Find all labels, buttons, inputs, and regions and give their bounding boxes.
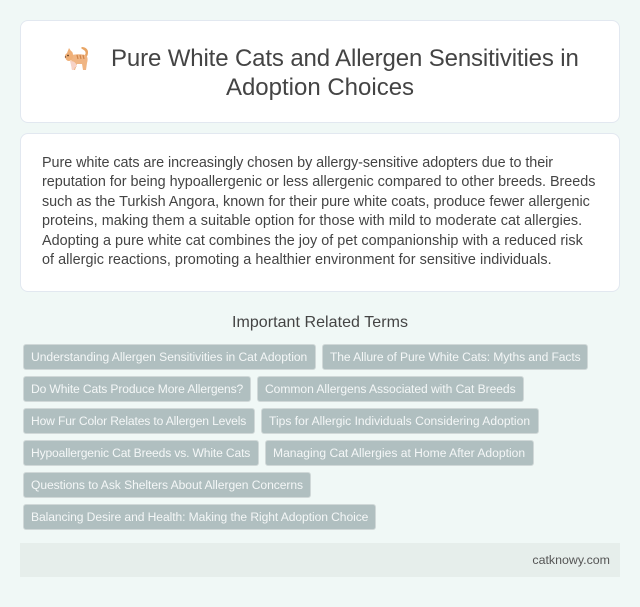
tags: related terms: Questions to Ask Shelters About Allergen Concerns (31, 478, 303, 492)
text block: description: Pure white cats are increasingly chosen by allergy-sensitive adopters due to their (42, 155, 553, 171)
text block: description: proteins, making them a suitable option for those with mild to moderate cat allergies. (42, 213, 582, 229)
text block: description (42, 155, 595, 268)
text block: description: Adopting a pure white cat combines the joy of pet companionship with a reduced risk (42, 233, 583, 249)
tags: related terms: The Allure of Pure White Cats: Myths and Facts (330, 350, 581, 364)
footer text: catknowy.com (532, 553, 610, 567)
tags: related terms: Hypoallergenic Cat Breeds vs. White Cats (31, 446, 250, 460)
text block: description: reputation for being hypoallergenic or less allergenic compared to other breeds. Breeds (42, 174, 595, 190)
icon: cat (64, 47, 88, 70)
footer bar (20, 543, 620, 577)
panel: description card (20, 133, 620, 292)
title: Pure White Cats and Allergen Sensitivities in (111, 45, 579, 72)
text block: description: of allergic reactions, promoting a healthier environment for sensitive individuals. (42, 252, 552, 268)
panel: title card (20, 20, 620, 123)
title line two: Adoption Choices (226, 74, 414, 101)
tags: related terms: Balancing Desire and Health: Making the Right Adoption Choice (31, 510, 368, 524)
tags: related terms: Understanding Allergen Sensitivities in Cat Adoption (31, 350, 307, 364)
tags: related terms: Common Allergens Associated with Cat Breeds (265, 382, 516, 396)
heading: important related terms: Important Related Terms (232, 314, 408, 331)
tags: related terms: How Fur Color Relates to Allergen Levels (31, 414, 246, 428)
tags: related terms: Managing Cat Allergies at Home After Adoption (273, 446, 525, 460)
text block: description: such as the Turkish Angora, known for their pure white coats, produce fewer allergenic (42, 194, 590, 210)
tags: related terms: Do White Cats Produce More Allergens? (31, 382, 243, 396)
tags: related terms: Tips for Allergic Individuals Considering Adoption (269, 414, 530, 428)
tags: related terms (23, 344, 588, 530)
